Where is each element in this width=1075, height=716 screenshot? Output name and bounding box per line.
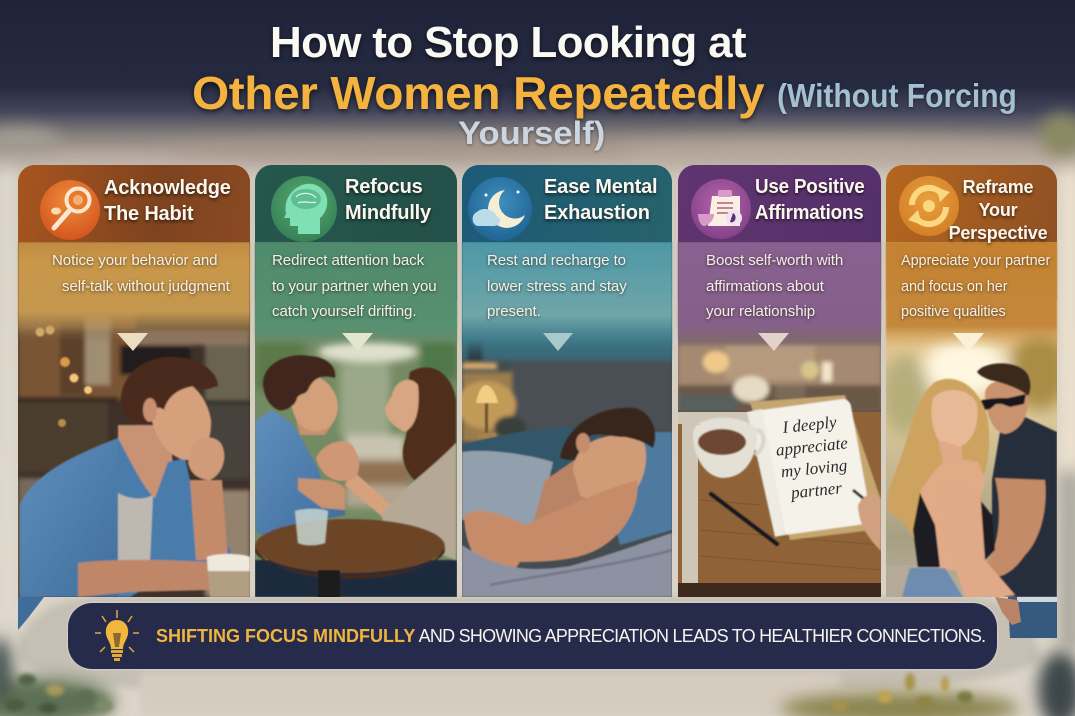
illustrated scenes (18, 300, 1057, 597)
text: acknowledge the habit: self-talk without judgment (62, 278, 230, 294)
arrow: panel 1 (117, 333, 148, 351)
text: refocus mindfully (271, 252, 438, 322)
heading: acknowledge the habit: The Habit (104, 202, 193, 224)
icon: light bulb (95, 610, 139, 661)
panel: use positive affirmations (678, 165, 881, 597)
panel: acknowledge the habit (18, 165, 250, 597)
heading: refocus mindfully (344, 176, 432, 226)
title suffix line 2: Yourself) (458, 115, 605, 151)
scene: couple holding hands at a table (255, 300, 457, 600)
text: ease mental exhaustion: present. (487, 303, 541, 320)
text: acknowledge the habit (51, 252, 231, 297)
heading: ease mental exhaustion: Exhaustion (544, 202, 650, 224)
banner text: SHIFTING FOCUS MINDFULLY AND SHOWING APPRECIATION LEADS TO HEALTHIER CONNECTIONS. (156, 626, 985, 646)
text: refocus mindfully: Redirect attention back (272, 252, 424, 269)
scene: happy couple at sunset (881, 300, 1070, 597)
text: refocus mindfully: catch yourself drifting. (272, 303, 416, 320)
text: reframe your perspective (900, 253, 1052, 321)
scene: journal and coffee on a table (678, 300, 881, 597)
heading: ease mental exhaustion: Ease Mental (544, 176, 657, 198)
heading: reframe your perspective: Reframe (963, 177, 1033, 197)
text: ease mental exhaustion (486, 252, 628, 321)
text: reframe your perspective: positive qualities (901, 304, 1006, 320)
text: use positive affirmations: your relationship (706, 303, 815, 320)
text: use positive affirmations: Boost self-worth with (706, 252, 843, 269)
heading: reframe your perspective (948, 177, 1048, 247)
heading: use positive affirmations (754, 176, 865, 224)
handwriting in journal: I deeply (782, 412, 837, 437)
text: ease mental exhaustion: lower stress and stay (487, 278, 627, 294)
arrow: panel 3 (543, 333, 573, 351)
icon: magnifying glass (40, 180, 100, 240)
text: ease mental exhaustion: Rest and recharge to (487, 252, 626, 269)
title (192, 18, 1017, 154)
scene: man thinking in a cafe (18, 300, 250, 598)
arrows pointing down (117, 333, 984, 351)
panel header band (678, 165, 881, 242)
wash: panel 3 (462, 242, 672, 364)
heading: use positive affirmations: Use Positive (755, 176, 865, 198)
panel: reframe your perspective (886, 165, 1057, 597)
denim and jeans continuing below the panels (18, 597, 1057, 638)
banner (68, 603, 997, 669)
text: use positive affirmations: affirmations about (706, 278, 824, 294)
title suffix: (Without Forcing (777, 77, 1017, 114)
text: use positive affirmations (705, 252, 844, 321)
wash: panel 1 (18, 242, 250, 342)
icons (40, 176, 959, 242)
handwriting in journal (775, 412, 849, 502)
handwriting in journal: my loving (780, 456, 848, 481)
wash: panel 4 (678, 242, 881, 344)
text: refocus mindfully: to your partner when you (272, 278, 437, 294)
heading: refocus mindfully: Mindfully (345, 202, 431, 224)
panel header band (886, 165, 1057, 242)
panel: refocus mindfully (255, 165, 457, 597)
arrow: panel 2 (342, 333, 373, 351)
text: reframe your perspective: and focus on her (901, 278, 1007, 294)
heading: acknowledge the habit: Acknowledge (104, 177, 231, 199)
text: acknowledge the habit: Notice your behavior and (52, 252, 217, 269)
heading: use positive affirmations: Affirmations (755, 202, 863, 224)
icon: head with brain (271, 176, 337, 242)
heading: acknowledge the habit (103, 177, 232, 224)
icon: affirmation clipboard (691, 179, 751, 239)
heading: reframe your perspective: Your (979, 200, 1017, 220)
wash: panel 2 (255, 242, 457, 347)
handwriting in journal: appreciate (775, 433, 849, 460)
panel description washes (17, 242, 1058, 361)
heading: ease mental exhaustion (544, 176, 658, 224)
icon: moon and clouds (468, 177, 532, 241)
panel header band (462, 165, 672, 242)
title line 2: Other Women Repeatedly (192, 67, 764, 119)
text: reframe your perspective: Appreciate your partner (901, 253, 1050, 269)
title line 1: How to Stop Looking at (270, 18, 746, 67)
arrow: panel 5 (953, 333, 984, 351)
panel header band (18, 165, 250, 242)
arrow: panel 4 (758, 333, 789, 351)
scene: man sleeping on a bed (462, 343, 672, 597)
panel: ease mental exhaustion (462, 165, 672, 597)
handwriting in journal: partner (790, 478, 843, 502)
icon: refresh arrows (899, 176, 959, 236)
wash: panel 5 (886, 242, 1057, 350)
heading: refocus mindfully: Refocus (345, 176, 423, 198)
heading: reframe your perspective: Perspective (949, 223, 1047, 243)
panel header band (255, 165, 457, 242)
